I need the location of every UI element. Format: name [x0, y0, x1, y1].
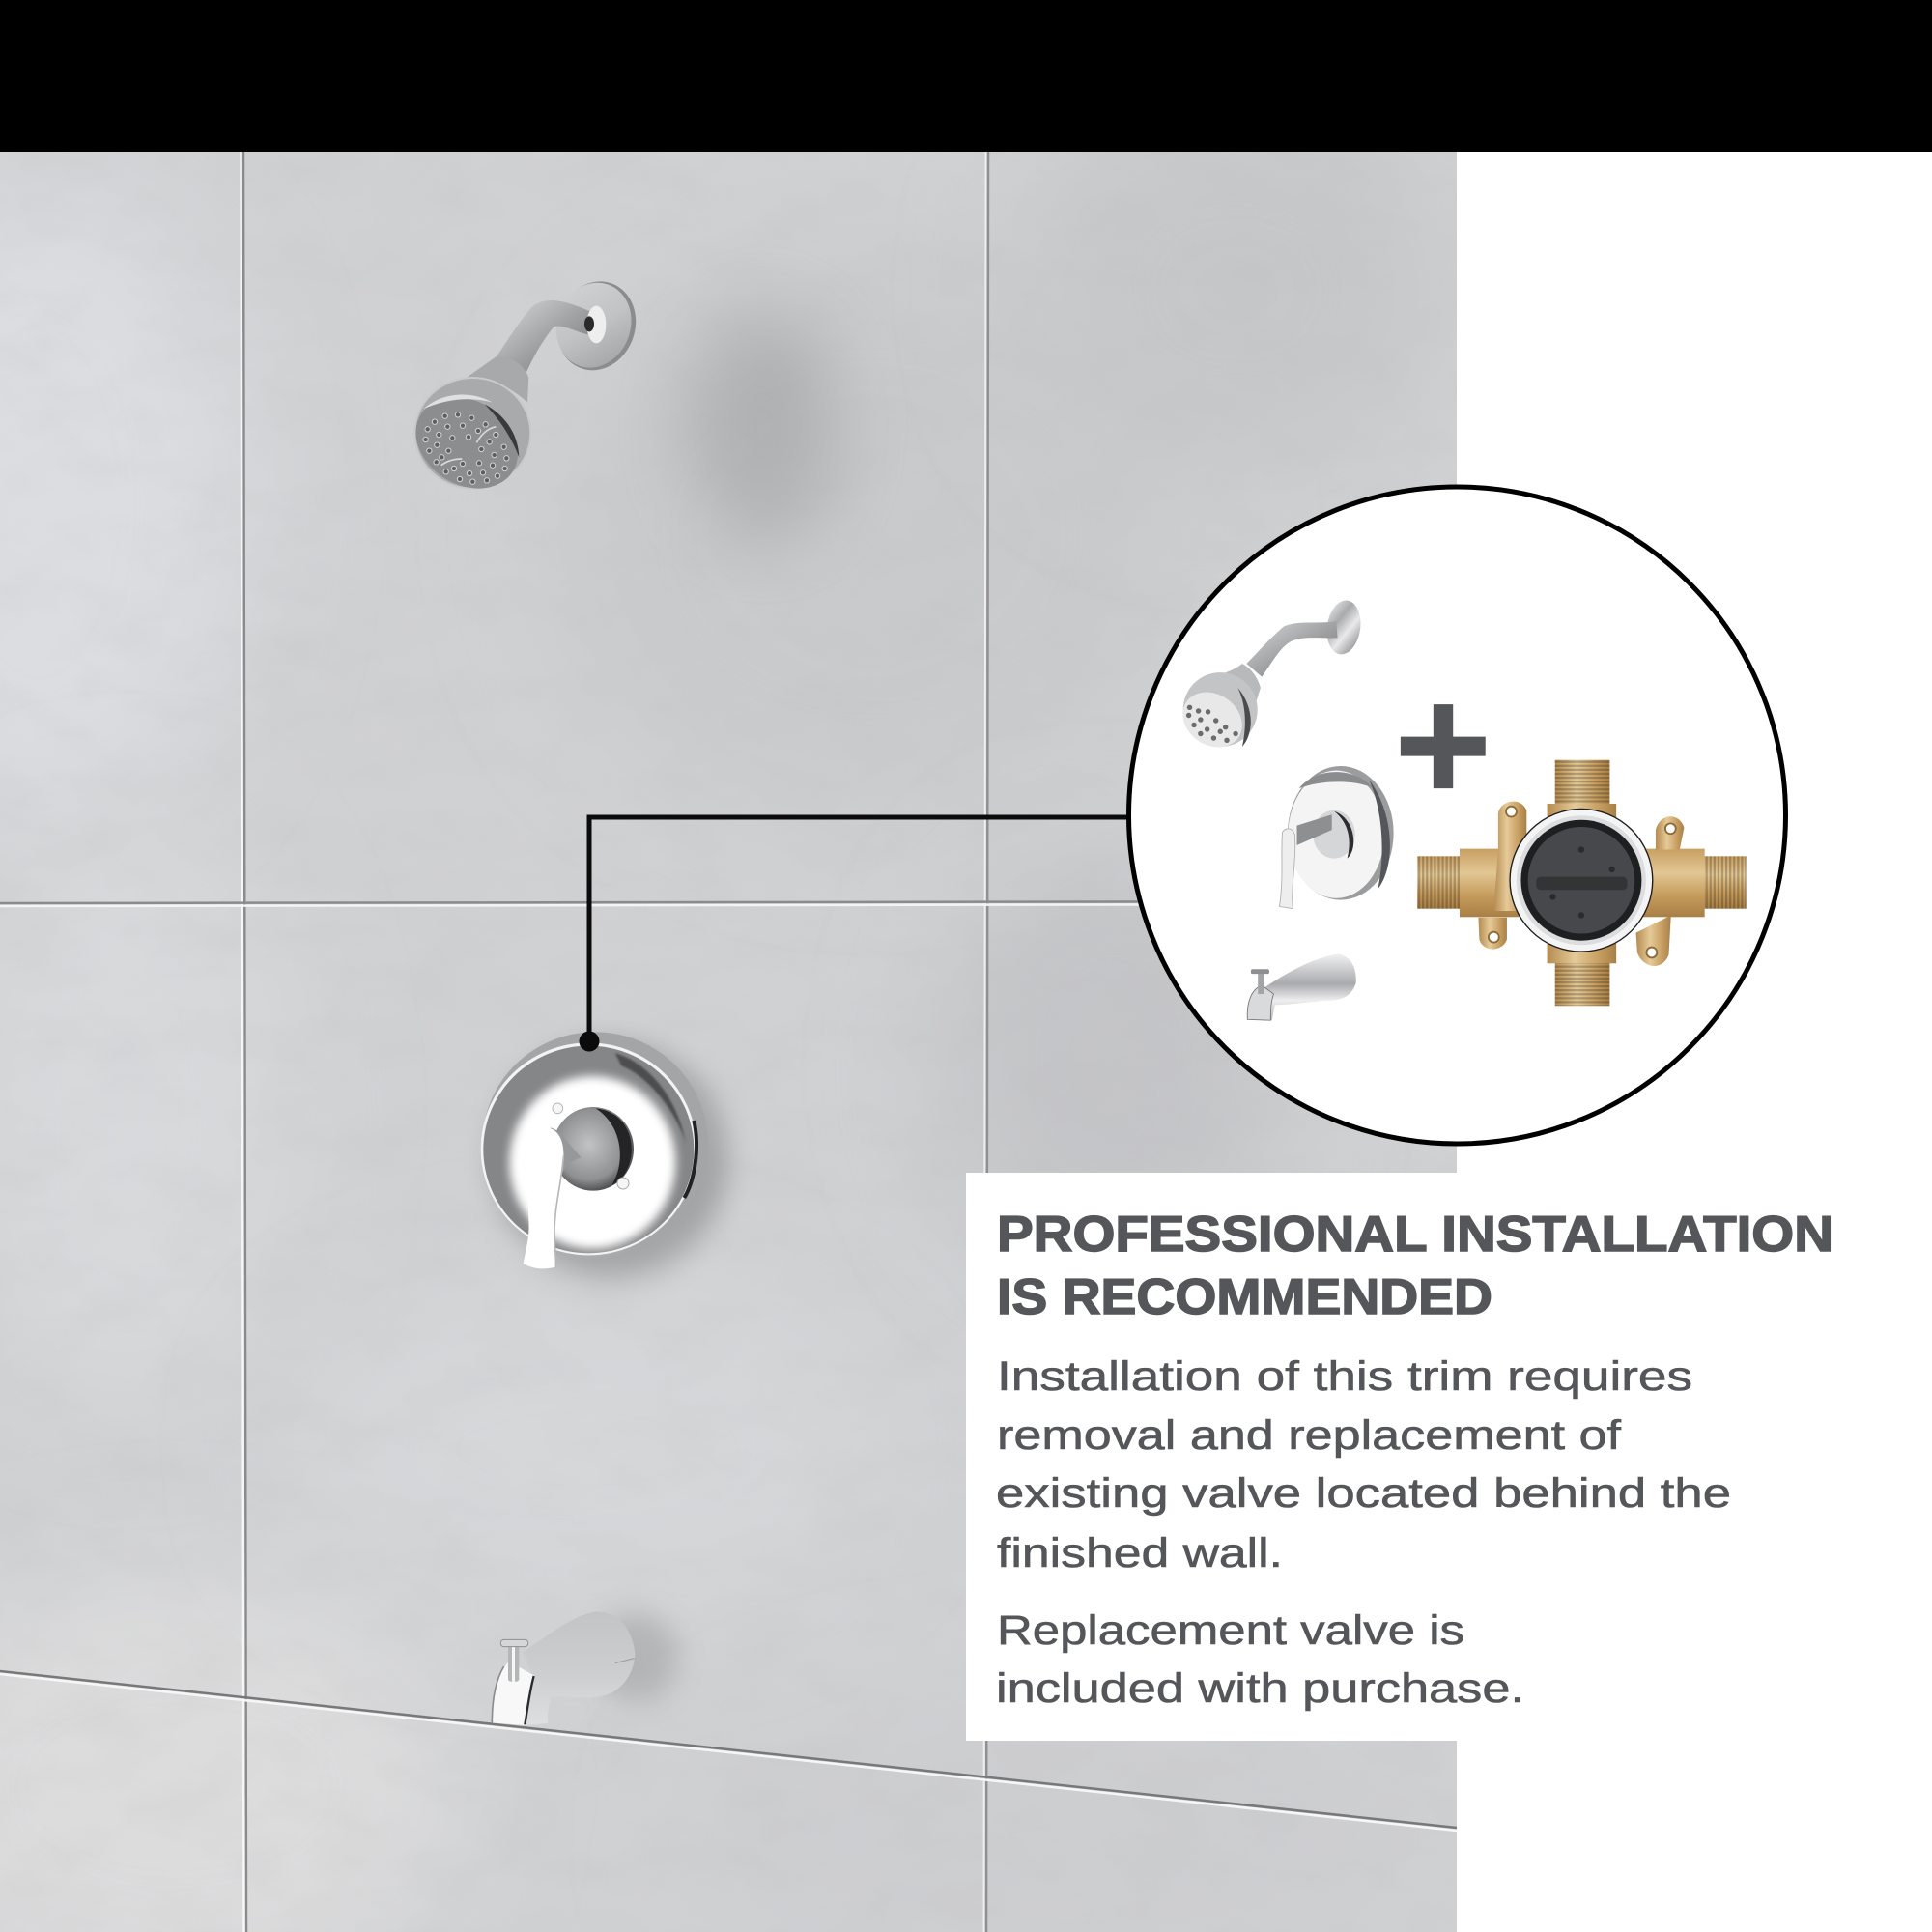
mounting ears [1493, 802, 1526, 911]
diverter knob [508, 1645, 519, 1682]
hub [553, 1107, 634, 1191]
tiled wall photo [0, 97, 1457, 1932]
spout nose [492, 1662, 535, 1725]
body copy: existing valve located behind the [996, 1470, 1731, 1517]
valve trim on wall [481, 1032, 708, 1268]
small shower head [1172, 598, 1364, 758]
heading: PROFESSIONAL INSTALLATION [997, 1207, 1833, 1263]
cast shadow of valve trim [493, 1041, 728, 1277]
tile grout lines [0, 152, 1457, 1932]
threaded nipples [1555, 760, 1609, 809]
text panel [966, 1173, 1833, 1741]
spray nozzles [423, 412, 509, 484]
chrome ring [1510, 809, 1653, 952]
plus sign [1401, 704, 1486, 788]
head face [399, 379, 535, 507]
body copy: included with purchase. [996, 1665, 1524, 1712]
heading: IS RECOMMENDED [997, 1269, 1492, 1325]
body copy: Installation of this trim requires [997, 1353, 1692, 1400]
lever [551, 1127, 582, 1179]
cast shadow of tub spout [593, 1612, 678, 1701]
cast shadow of shower head [686, 309, 840, 541]
heading [997, 1207, 1833, 1325]
body copy: finished wall. [997, 1530, 1283, 1577]
body copy: Replacement valve is [997, 1607, 1464, 1654]
black cap [1520, 820, 1641, 941]
shower head on wall [399, 270, 648, 507]
tub spout on wall [492, 1611, 635, 1725]
arm [497, 300, 592, 374]
small valve trim [1279, 766, 1394, 909]
callout circle [1128, 487, 1785, 1144]
rough-in brass valve [1417, 760, 1747, 1006]
top black band [0, 0, 1932, 152]
body copy [996, 1353, 1731, 1712]
flange [545, 270, 648, 382]
valve body [1460, 849, 1705, 917]
circle contents [1172, 598, 1747, 1020]
head body [414, 378, 530, 489]
connector line [580, 817, 1130, 1051]
body copy: removal and replacement of [997, 1412, 1622, 1459]
screws [553, 1103, 563, 1114]
neck [467, 356, 528, 403]
spout body [524, 1611, 635, 1725]
small tub spout [1247, 953, 1356, 1020]
trim plate [482, 1032, 708, 1254]
